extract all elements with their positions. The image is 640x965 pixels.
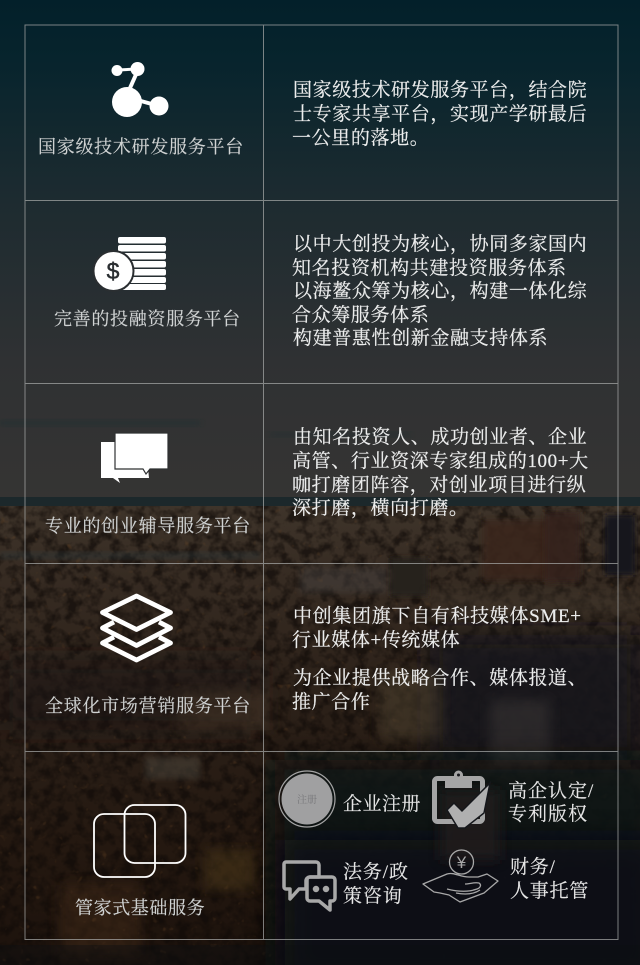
label: finance and HR outsourcing: 人事托管 [510,880,589,902]
icon: molecule nodes [112,62,168,117]
text block: investment platform: 合众筹服务体系 [292,304,429,326]
label: high-tech certification and patents [508,780,594,825]
text block: coaching platform: 深打磨，横向打磨。 [292,497,469,519]
panel: service items [279,770,594,910]
icon: hand holding yen coin: ¥ [456,853,467,872]
panel: research platform [38,62,587,157]
heading: basic services: 管家式基础服务 [75,898,205,918]
text block: research platform: 一公里的落地。 [292,127,429,149]
text block: marketing platform: 为企业提供战略合作、媒体报道、 [293,667,587,689]
heading: investment platform: 完善的投融资服务平台 [54,308,241,329]
icon: overlapping squares [94,805,186,877]
heading: marketing platform: 全球化市场营销服务平台 [45,696,251,716]
text block: marketing platform: 行业媒体+传统媒体 [292,629,460,651]
label: legal and policy consulting: 策咨询 [343,885,403,907]
label: high-tech certification and patents: 高企认定/ [508,780,594,802]
text block: marketing platform: 中创集团旗下自有科技媒体SME+ [293,605,582,627]
icon: speech bubbles [101,433,168,483]
text block: coaching platform: 咖打磨团阵容，对创业项目进行纵 [292,474,586,496]
text block: research platform: 国家级技术研发服务平台，结合院 [293,79,587,101]
text block: coaching platform [292,426,589,519]
heading: research platform: 国家级技术研发服务平台 [38,137,244,157]
label: finance and HR outsourcing [510,856,589,902]
text block: investment platform [292,233,588,349]
icon: coin stack and dollar [94,237,166,291]
text block: investment platform: 以中大创投为核心，协同多家国内 [293,233,587,255]
label: company registration: 企业注册 [343,793,421,815]
label: high-tech certification and patents: 专利版权 [508,803,588,825]
text block: investment platform: 以海鳌众筹为核心，构建一体化综 [293,280,588,302]
text block: investment platform: 知名投资机构共建投资服务体系 [292,257,567,279]
panel: basic services [75,805,205,918]
icon: chat bubbles [284,862,335,910]
icon: registration badge: 注册 [297,794,317,806]
panel: global marketing platform [45,596,587,716]
text block: coaching platform: 高管、行业资深专家组成的100+大 [292,450,589,472]
icon: clipboard check [434,770,490,828]
text block: investment platform: 构建普惠性创新金融支持体系 [293,327,548,349]
text block: coaching platform: 由知名投资人、成功创业者、企业 [293,426,587,448]
text block: marketing platform: 推广合作 [292,691,370,713]
text block: research platform: 士专家共享平台，实现产学研最后 [293,103,587,125]
heading: coaching platform: 专业的创业辅导服务平台 [45,516,251,536]
label: legal and policy consulting [343,861,409,907]
panel: startup coaching platform [45,426,589,536]
panel: investment and financing platform [54,233,588,349]
text block: marketing platform [292,605,587,713]
label: legal and policy consulting: 法务/政 [343,861,409,883]
text block: research platform [292,79,587,149]
label: finance and HR outsourcing: 财务/ [510,856,556,878]
icon: hand holding yen coin [423,850,498,902]
icon: stacked layers [102,596,170,660]
icon: coin stack and dollar: $ [107,258,120,284]
icon: registration badge [279,771,335,827]
